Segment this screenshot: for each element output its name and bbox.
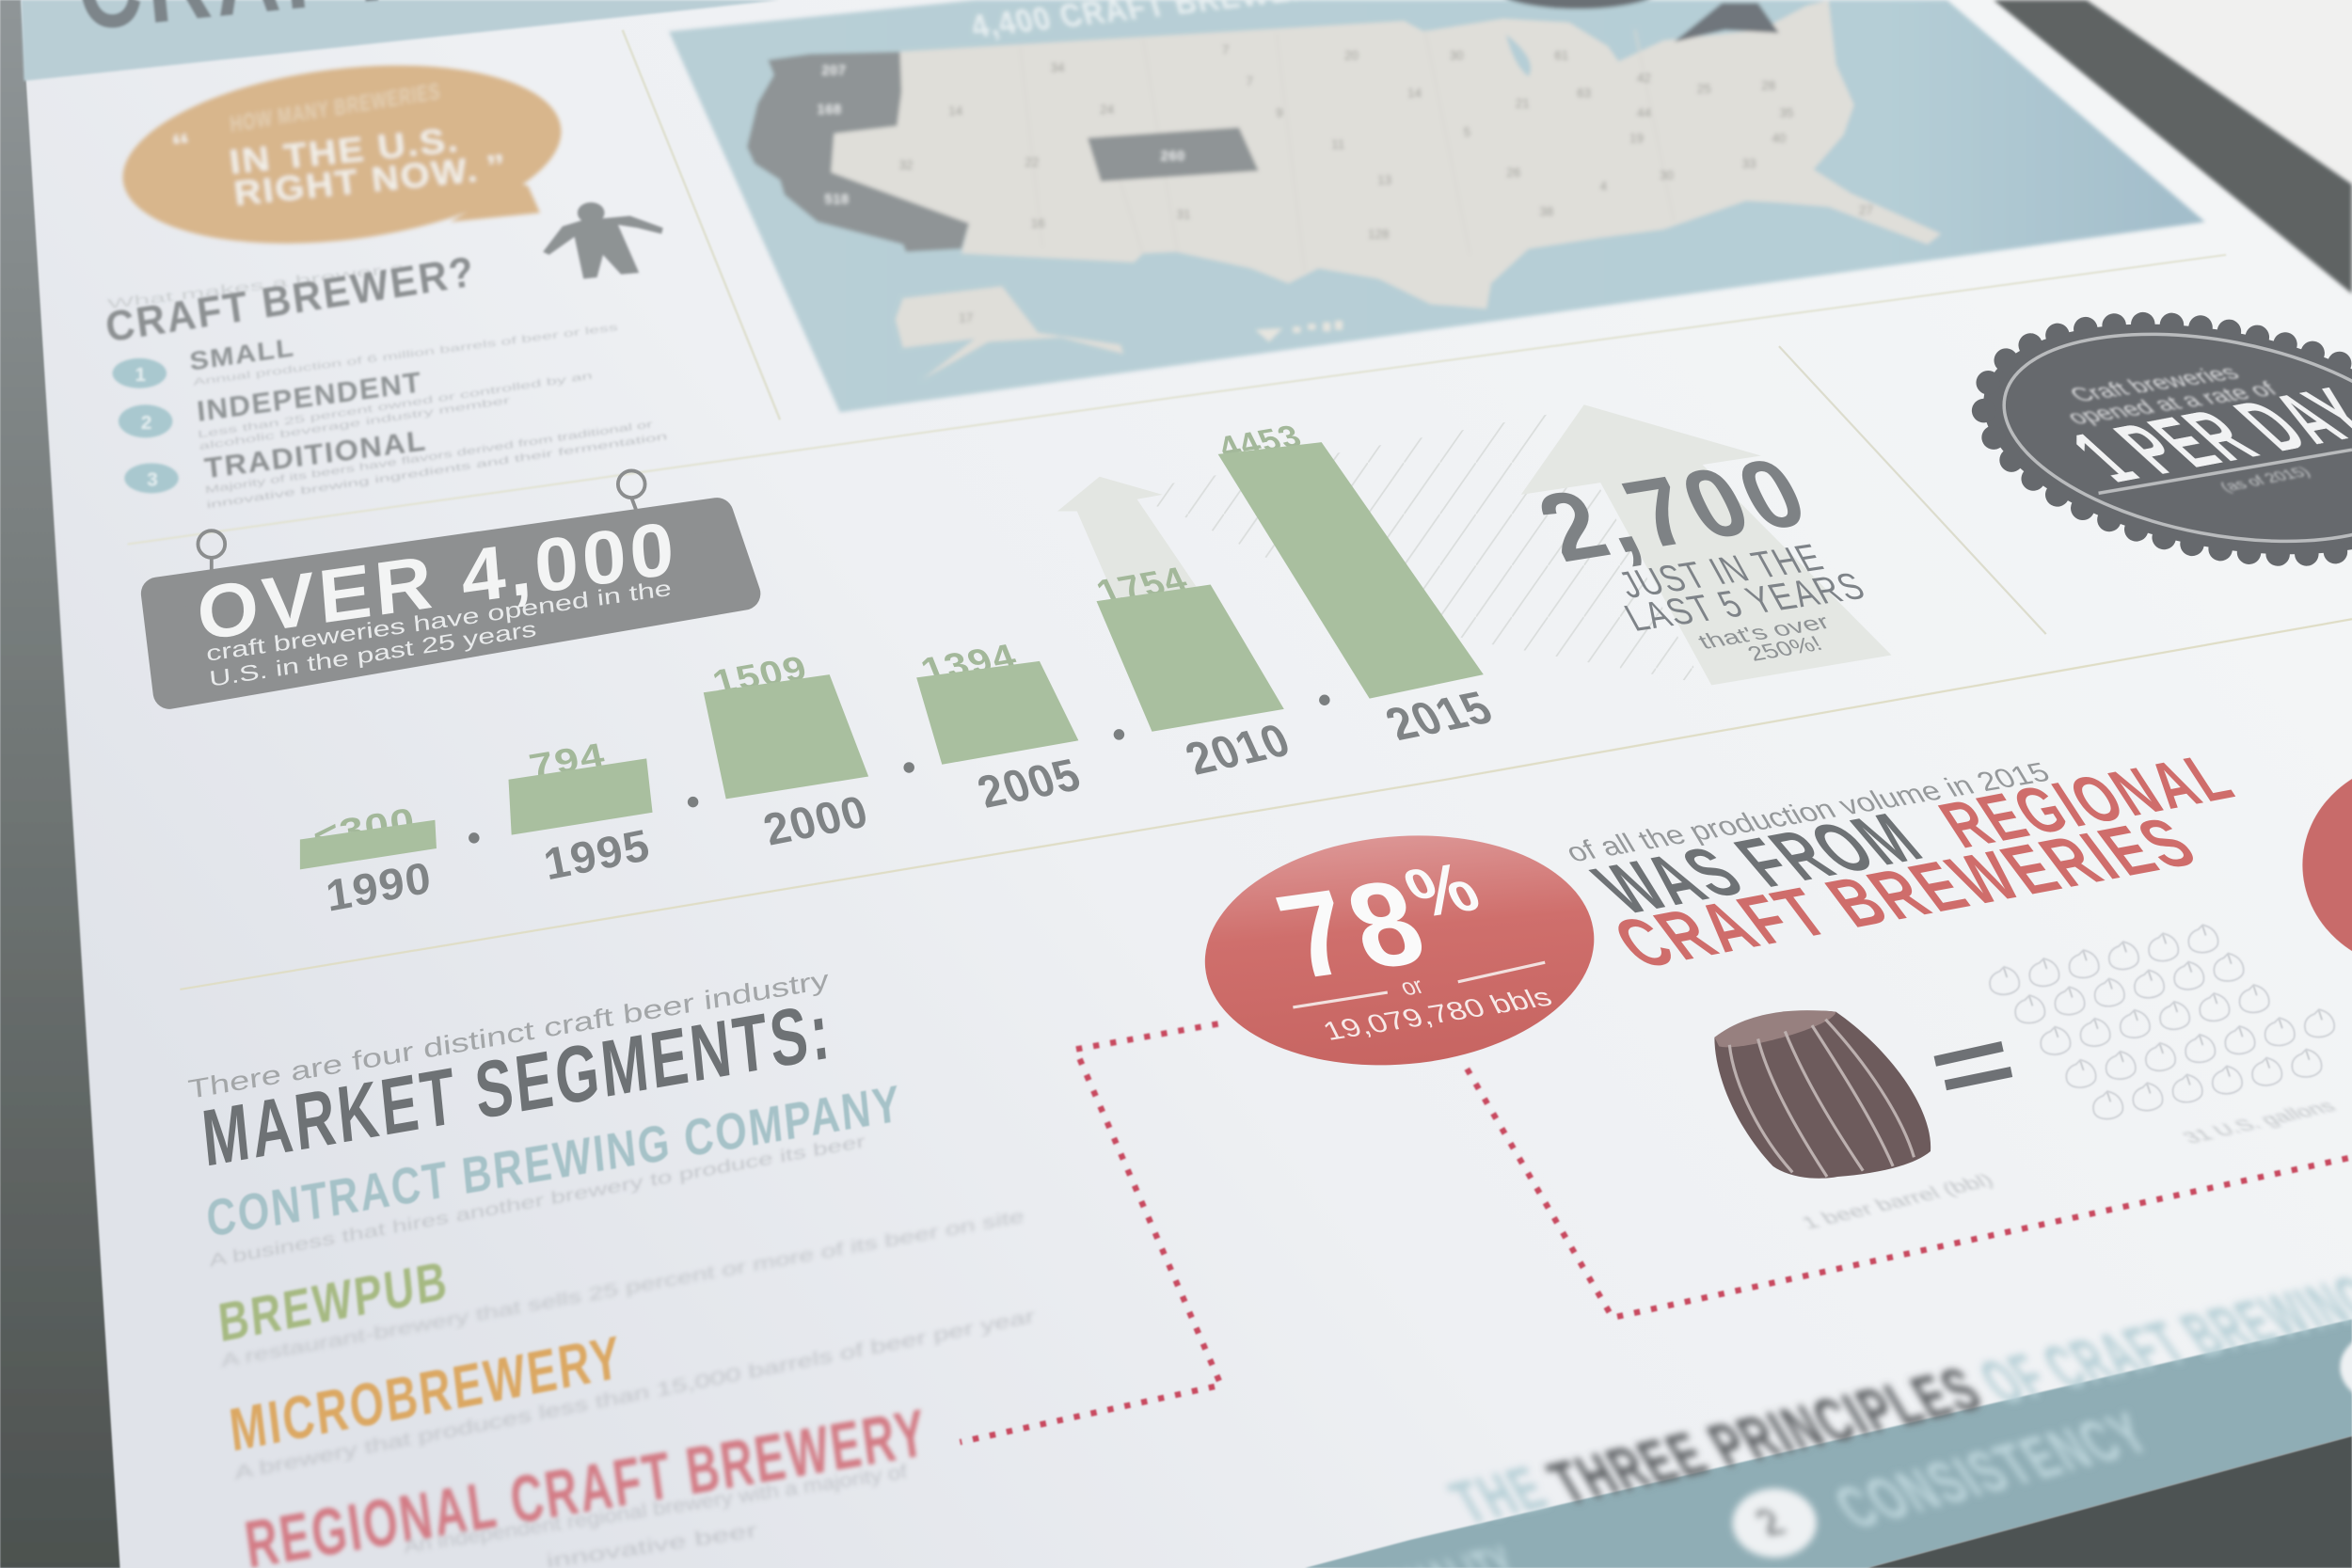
sign rings <box>212 498 636 578</box>
seal ring <box>1987 302 2352 574</box>
year labels: 1995 <box>540 819 655 889</box>
note line two: 250%! <box>1743 632 1827 665</box>
line two: CRAFT BREWERIES <box>1597 803 2214 982</box>
map panel: 21 <box>1516 97 1530 111</box>
sign heading: OVER 4,000 <box>194 505 681 656</box>
speech bubble <box>113 42 571 266</box>
seal text: (as of 2015) <box>2217 465 2314 495</box>
bubble text: “ <box>169 127 194 163</box>
bubble text <box>169 79 509 213</box>
map panel: 32 <box>898 158 914 172</box>
bubble text: ” <box>485 148 509 183</box>
bar values <box>310 419 1309 856</box>
state counts: 207 <box>821 64 847 79</box>
state counts: 260 <box>1161 150 1185 165</box>
dividers <box>1293 962 1545 1007</box>
year dots <box>469 695 1330 844</box>
map panel: 42 <box>1637 71 1651 86</box>
item: independent: Less than 25 percent owned or controlled by an <box>198 371 593 440</box>
map panel: 44 <box>1637 105 1651 119</box>
caption line two: LAST 5 YEARS <box>1617 565 1873 639</box>
sign text: craft breweries have opened in the <box>205 576 673 666</box>
map panel: 34 <box>1051 60 1065 74</box>
map panel: 7 <box>1246 74 1253 88</box>
volume: 19,079,780 bbls <box>1318 982 1557 1046</box>
number: 2,700 <box>1521 438 1828 582</box>
callout 2,700 <box>1521 438 1873 665</box>
three principles band <box>1305 1263 2352 1568</box>
circle 78 percent <box>1196 820 1604 1081</box>
band heading <box>1439 1263 2352 1537</box>
segment: brewpub: A restaurant-brewery that sells 25 percent or more of its beer on site <box>220 1207 1025 1371</box>
map panel: 13 <box>1377 173 1391 187</box>
stamp top <box>1496 0 1661 9</box>
bar values: 1394 <box>915 637 1023 689</box>
header banner <box>21 0 780 81</box>
intro: There are four distinct craft beer industry <box>186 963 832 1104</box>
equals sign <box>1935 1046 2011 1085</box>
seal text <box>2060 361 2314 495</box>
divider lower <box>180 619 2352 990</box>
year labels: 2015 <box>1376 682 1502 750</box>
map panel: 35 <box>1779 105 1793 119</box>
item: small: Annual production of 6 million barrels of beer or less <box>193 323 618 388</box>
circle 78 percent: % <box>1392 847 1495 931</box>
state counts <box>818 64 1185 208</box>
principle 2: 2 <box>1746 1500 1796 1544</box>
map panel: 30 <box>1450 49 1464 63</box>
heading: What makes a brewer a <box>107 261 407 312</box>
item: small <box>113 323 618 388</box>
craft brewer definition <box>103 246 668 511</box>
arrow small <box>1057 477 1200 604</box>
item: independent: alcoholic beverage industry member <box>199 396 511 452</box>
bars <box>300 442 1484 869</box>
map: west coast states <box>747 52 969 252</box>
map panel: 63 <box>1577 87 1591 101</box>
map: colorado <box>1088 127 1259 182</box>
year labels: 2005 <box>971 750 1089 818</box>
barrel caption: 1 beer barrel (bbl) <box>1798 1171 1998 1233</box>
map panel: 33 <box>1742 156 1756 170</box>
caption line one: JUST IN THE <box>1612 536 1832 606</box>
item: traditional: TRADITIONAL <box>203 424 428 484</box>
vertical divider left <box>623 30 780 420</box>
vertical divider right <box>1779 346 2046 634</box>
dotted connector left <box>960 1023 1221 1442</box>
market segments <box>186 963 1036 1568</box>
hanging sign <box>157 470 744 692</box>
year labels: 1990 <box>323 852 435 921</box>
segment: contract <box>204 1073 904 1271</box>
map panel: 17 <box>959 311 973 325</box>
lake <box>1506 35 1531 76</box>
production headline <box>1560 740 2249 982</box>
map: new york <box>1674 3 1779 42</box>
map panel: 27 <box>1859 203 1873 217</box>
segment: contract: A business that hires another brewery to produce its beer <box>209 1131 866 1271</box>
item: traditional: innovative brewing ingredients and their fermentation <box>206 432 668 511</box>
item: small: SMALL <box>188 332 296 376</box>
hatch background <box>1110 412 1703 684</box>
principle 2: CONSISTENCY <box>1821 1399 2164 1541</box>
frame left edge <box>0 0 120 1568</box>
segment: contract: CONTRACT BREWING COMPANY <box>204 1073 904 1248</box>
principle 3 marker <box>2340 1331 2352 1403</box>
segment: microbrewery: A brewery that produces less than 15,000 barrels of beer per year <box>233 1307 1036 1484</box>
map panel: 20 <box>1344 49 1359 63</box>
map panel: 40 <box>1772 131 1786 145</box>
band heading: THREE PRINCIPLES <box>1537 1355 1995 1518</box>
map panel: 22 <box>1025 155 1039 169</box>
map panel: 19 <box>1629 131 1644 145</box>
dotted connector right <box>1467 1069 2352 1318</box>
teal band <box>1305 1319 2352 1568</box>
icon: person <box>543 202 663 278</box>
map panel: 4 <box>1600 179 1608 193</box>
bar values: <300 <box>310 800 418 856</box>
or: or <box>1396 973 1428 1001</box>
segment: brewpub: BREWPUB <box>215 1250 452 1354</box>
item: traditional <box>124 420 668 511</box>
map panel: 30 <box>1660 168 1674 182</box>
segment: regional <box>241 1396 932 1568</box>
production headline: REGIONAL <box>1926 740 2249 862</box>
bar values: 4453 <box>1213 419 1309 466</box>
map: alaska <box>896 286 1123 379</box>
seal shape <box>1964 289 2352 590</box>
map panel: 9 <box>1276 105 1283 119</box>
sign plate <box>157 515 744 692</box>
map panel: 28 <box>1761 79 1775 93</box>
map: hawaii <box>1256 321 1343 341</box>
percent value: 78 <box>1263 855 1446 1005</box>
seal text: opened at a rate of <box>2060 377 2282 428</box>
map panel <box>669 0 2205 412</box>
frame right edge <box>1994 0 2352 293</box>
bar values: 1754 <box>1089 559 1194 611</box>
item: small: 1 <box>135 364 147 386</box>
bubble text: HOW MANY BREWERIES <box>229 79 441 137</box>
map: contiguous us <box>831 0 1941 309</box>
segment: microbrewery: MICROBREWERY <box>226 1323 626 1465</box>
bubble text: RIGHT NOW. <box>231 150 481 213</box>
map panel: 26 <box>1506 166 1520 180</box>
growler grid <box>1990 925 2334 1119</box>
red circle right edge <box>2302 760 2352 970</box>
map panel: 14 <box>1407 87 1422 101</box>
map panel: 7 <box>1222 42 1229 56</box>
seal text: Craft breweries <box>2063 361 2245 405</box>
frame bottom <box>1867 1436 2352 1568</box>
map panel: 11 <box>1331 137 1344 151</box>
intro: of all the production volume in 2015 <box>1560 757 2056 868</box>
map panel: 38 <box>1539 204 1553 218</box>
divider upper <box>128 255 2226 545</box>
bar chart <box>300 419 1502 921</box>
map panel: 24 <box>1100 103 1115 117</box>
map panel: 31 <box>1176 208 1191 222</box>
bubble text: IN THE U.S. <box>228 120 461 182</box>
segment: brewpub <box>215 1207 1025 1371</box>
growler caption: 31 U.S. gallons <box>2179 1098 2341 1148</box>
map panel: 5 <box>1464 125 1470 139</box>
map panel: 61 <box>1554 49 1568 63</box>
band heading: THE <box>1439 1454 1560 1537</box>
map panel: 14 <box>948 104 963 119</box>
year labels: 2010 <box>1178 715 1299 784</box>
item: traditional: 3 <box>147 468 159 490</box>
note line one: that's over <box>1693 610 1835 654</box>
state counts: 518 <box>825 193 850 208</box>
state dividers <box>1020 30 1674 273</box>
segment: microbrewery <box>226 1307 1036 1484</box>
item: traditional: Majority of its beers have flavors derived from traditional or <box>205 420 654 496</box>
year labels: 2000 <box>758 786 875 855</box>
state counts: 168 <box>818 103 842 118</box>
icon: barrel <box>1714 1010 1931 1179</box>
seal badge <box>1964 289 2352 590</box>
map panel: 25 <box>1697 82 1711 96</box>
craft brewer definition: CRAFT BREWER? <box>103 246 478 351</box>
item: independent <box>119 366 593 452</box>
segment: regional: An independent regional brewery with a majority of <box>403 1461 909 1558</box>
heading: MARKET SEGMENTS: <box>199 986 835 1184</box>
principle 2 <box>1733 1399 2164 1558</box>
item: independent: INDEPENDENT <box>196 366 423 428</box>
item: independent: 2 <box>141 412 152 434</box>
year labels <box>323 682 1502 921</box>
map panel: 16 <box>1031 216 1045 230</box>
bar values: 1509 <box>707 648 812 702</box>
seal underline <box>2099 450 2352 493</box>
map panel: 128 <box>1368 227 1390 241</box>
wall behind frame <box>2087 0 2352 184</box>
arrow large <box>1521 404 1892 685</box>
bar values: 794 <box>526 736 610 785</box>
line one: WAS FROM <box>1577 800 1941 928</box>
hanging sign: U.S. in the past 25 years <box>208 616 537 691</box>
